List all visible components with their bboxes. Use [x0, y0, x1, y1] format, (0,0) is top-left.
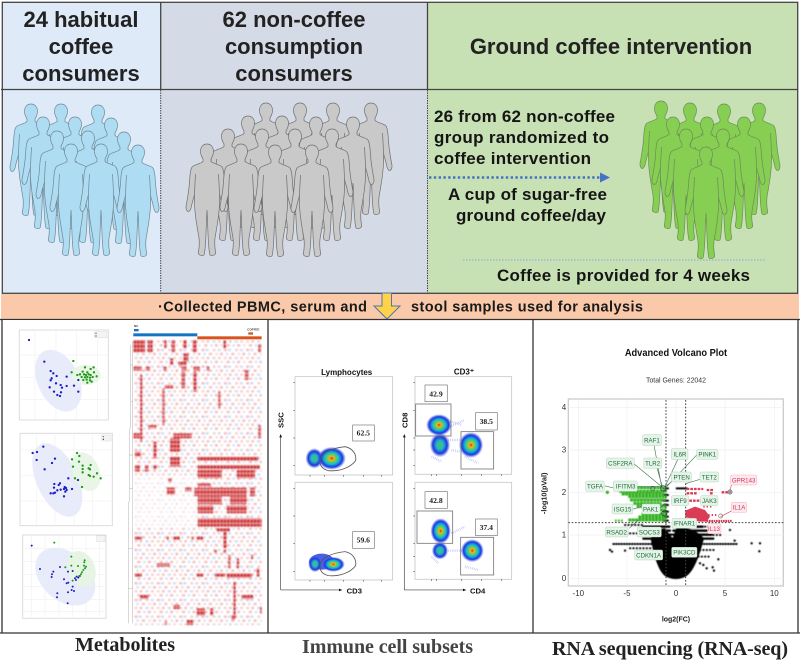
- label: 62.5: 62.5: [357, 429, 370, 438]
- heading: 24 habitual coffee consumers: coffee: [49, 34, 113, 59]
- heading: 62 non-coffee consumption consumers: consumption: [225, 34, 363, 59]
- heading: 24 habitual coffee consumers: 24 habitual: [24, 7, 138, 32]
- icon: group of green people: [640, 101, 780, 259]
- gene labels green: IFNAR1: [673, 521, 696, 528]
- icon: group of blue people: [10, 104, 159, 257]
- axis tick labels: 1: [562, 531, 567, 540]
- text: a cup of coffee per day: [448, 185, 607, 225]
- heading: CD3+: CD3⁺: [454, 368, 474, 377]
- chart: metabolite heatmap: NC: [134, 324, 139, 328]
- chart: lymphocytes flow plot bottom: [293, 482, 393, 582]
- axis title: -log10(pVal): -log10(pVal): [540, 472, 549, 514]
- text: randomization note: 26 from 62 non-coffee: [434, 107, 615, 126]
- axis tick labels: 0: [674, 589, 679, 598]
- heading: 62 non-coffee consumption consumers: consumers: [235, 61, 353, 86]
- axis tick labels: 2: [562, 488, 567, 497]
- gene labels green: CSF2RA: [608, 461, 633, 468]
- gene labels green: SOCS3: [639, 529, 660, 536]
- caption: RNA sequencing: RNA sequencing (RNA-seq): [552, 638, 788, 660]
- axis tick labels: -10: [573, 589, 585, 598]
- gene labels green: JAK3: [702, 498, 717, 505]
- heading: 24 habitual coffee consumers: consumers: [22, 61, 140, 86]
- gene labels green: [586, 435, 719, 560]
- axis tick labels: 3: [562, 446, 567, 455]
- gene labels green: ISG15: [614, 506, 632, 513]
- gene labels green: TLR2: [645, 461, 661, 468]
- label: 42.8: 42.8: [429, 496, 443, 505]
- panel: ground coffee intervention: [428, 2, 798, 293]
- text: total genes: Total Genes: 22042: [646, 375, 706, 384]
- gene labels red: GPR143: [732, 477, 756, 484]
- heading: 24 habitual coffee consumers: [22, 7, 140, 86]
- chart: volcano plot: [568, 399, 783, 586]
- axis tick labels: 0: [562, 574, 567, 583]
- chart: lymphocytes flow plot top: [293, 377, 393, 477]
- text: collected samples left: ·Collected PBMC, serum and: [158, 300, 367, 316]
- heading: 62 non-coffee consumption consumers: [222, 7, 366, 86]
- axis tick labels: 4: [562, 403, 567, 412]
- panel: habitual coffee consumers: [2, 2, 161, 293]
- axes: SSC vs CD3: CD3: [347, 586, 362, 595]
- gene labels green: RAF1: [644, 438, 660, 445]
- heading: 62 non-coffee consumption consumers: 62 non-coffee: [222, 7, 366, 32]
- panel: metabolites: [2, 320, 268, 633]
- label: 59.6: 59.6: [357, 536, 370, 545]
- text: coffee provided for 4 weeks: Coffee is provided for 4 weeks: [497, 266, 750, 285]
- band: sample collection: [1, 293, 799, 319]
- axes: CD8 vs CD4: CD4: [470, 586, 486, 595]
- arrow: dotted blue arrow: [429, 172, 610, 182]
- label: 42.9: 42.9: [429, 389, 443, 398]
- label: 37.4: 37.4: [480, 523, 493, 532]
- axes: CD8 vs CD4: [400, 412, 486, 595]
- gene labels green: PINK1: [698, 452, 717, 459]
- chart: metabolite heatmap: COFFEE: [247, 327, 259, 331]
- gene labels red: IL1A: [733, 505, 746, 512]
- axes: CD8 vs CD4: CD8: [400, 412, 409, 428]
- black points: [610, 488, 760, 579]
- text: collected samples right: stool samples used for analysis: [411, 300, 643, 316]
- panel: non-coffee consumers: [161, 2, 428, 293]
- panel: immune cell subsets: [277, 368, 512, 595]
- gene labels green: RSAD2: [606, 529, 627, 536]
- text: a cup of coffee per day: ground coffee/day: [456, 206, 607, 225]
- label: 38.5: 38.5: [480, 417, 493, 426]
- gene labels green: TET2: [702, 474, 717, 481]
- heading: ground coffee intervention: Ground coffee intervention: [470, 34, 752, 59]
- text: a cup of coffee per day: A cup of sugar-free: [448, 185, 607, 204]
- axes: SSC vs CD3: SSC: [277, 412, 286, 428]
- heading: advanced volcano plot: Advanced Volcano Plot: [625, 348, 728, 359]
- gene labels green: IRF9: [673, 498, 687, 505]
- axes: SSC vs CD3: [277, 412, 362, 595]
- gene labels green: IL6R: [673, 452, 687, 459]
- gene labels green: PIK3CD: [673, 550, 696, 557]
- chart: score plot 1: [19, 330, 108, 420]
- text: randomization note: group randomized to: [434, 128, 609, 147]
- chart: score plot 2: [20, 433, 112, 526]
- panel: RNA sequencing volcano plot: [540, 348, 783, 624]
- axis tick labels: 5: [723, 589, 728, 598]
- axis tick labels: [562, 403, 779, 598]
- icon: group of gray people: [186, 103, 392, 257]
- gene labels green: CDKN1A: [636, 552, 662, 559]
- caption: metabolites: Metabolites: [75, 634, 175, 656]
- chart: metabolite heatmap: [128, 324, 262, 625]
- heading: lymphocytes: Lymphocytes: [321, 368, 373, 377]
- gene labels green: TGFA: [587, 483, 604, 490]
- red points: [685, 489, 732, 522]
- axis tick labels: -5: [623, 589, 631, 598]
- green points: [607, 488, 667, 521]
- axis title: log2(FC): log2(FC): [662, 615, 691, 624]
- axis tick labels: 10: [770, 589, 779, 598]
- gene labels red: IL13: [708, 526, 721, 533]
- gene labels green: PTEN: [673, 474, 690, 481]
- arrow: yellow down arrow: [374, 293, 400, 319]
- gene labels red: [708, 475, 757, 534]
- chart: CD3+ flow plot bottom: [413, 482, 512, 581]
- text: randomization note: coffee intervention: [434, 149, 591, 168]
- gene labels green: IFITM3: [616, 483, 636, 490]
- gene labels green: PAK1: [643, 506, 659, 513]
- chart: score plot 3: [23, 535, 107, 618]
- caption: immune cell subsets: Immune cell subsets: [302, 636, 473, 658]
- chart: CD3+ flow plot top: [413, 377, 512, 476]
- text: randomization note: [434, 107, 615, 168]
